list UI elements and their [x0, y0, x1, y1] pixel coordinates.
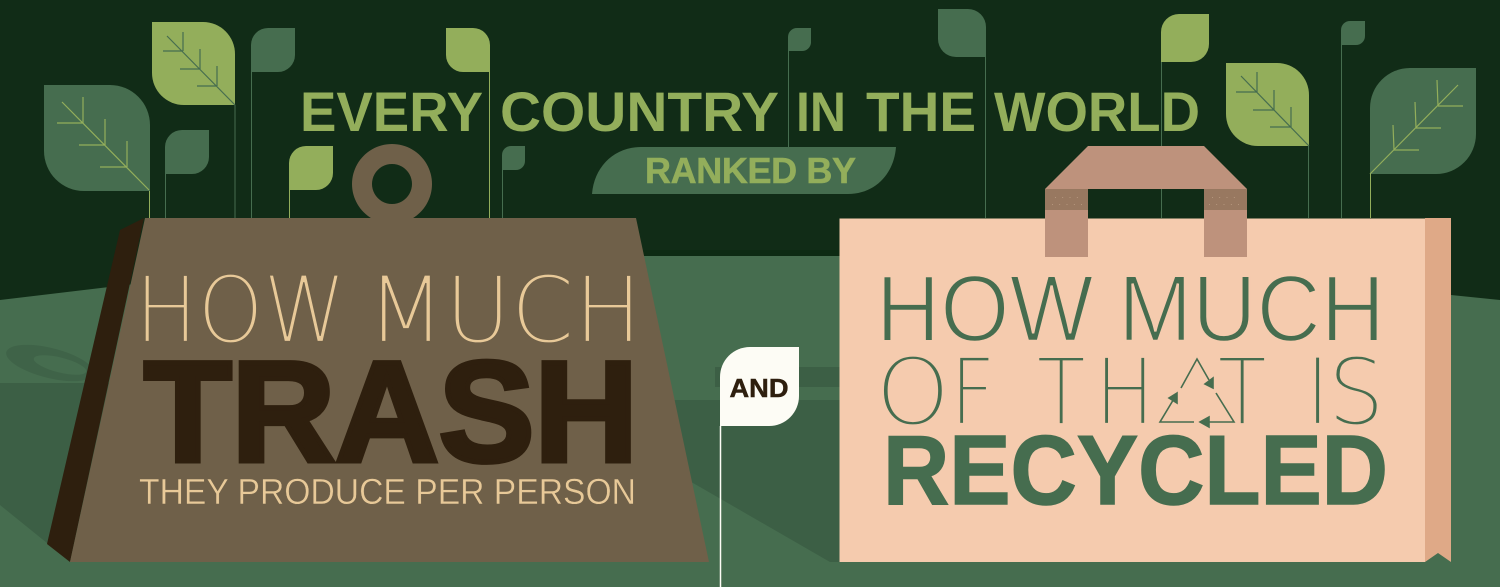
weight: ring handle [352, 144, 432, 224]
leaf: tiny dark at 502 [502, 146, 525, 218]
weight text: how much: MUCH [367, 259, 642, 364]
bag text: t is: T I [1218, 340, 1329, 446]
leaf: small dark at 251 [251, 28, 295, 218]
bag text: recycled: RECYCLED [883, 415, 1388, 525]
title: IN [796, 80, 846, 143]
leaf: dark at 938 [938, 9, 986, 218]
leaf: small dark at 165 [165, 130, 209, 218]
leaf: light at 1161 [1161, 14, 1209, 218]
leaf: large light left [152, 22, 235, 218]
bag text: t is [1218, 340, 1385, 446]
bag: side gusset [1425, 218, 1451, 562]
title: COUNTRY [500, 80, 779, 143]
title: THE [866, 80, 976, 143]
weight text: trash: TRASH [144, 333, 638, 492]
weight text: they produce per person: THEY PRODUCE PER PERSON [139, 471, 636, 512]
title [300, 80, 1200, 143]
leaf: tiny dark at 1341 [1341, 21, 1365, 218]
leaf: large light right [1226, 63, 1309, 218]
flag: and: AND [730, 373, 788, 403]
leaf: large dark left [44, 85, 150, 218]
bag text: of that: O [876, 339, 950, 445]
bag text: how much: HOW MUCH [876, 256, 1385, 362]
weight: body [47, 218, 709, 562]
weight text: how much [135, 259, 642, 364]
bag text: t is: S [1328, 340, 1385, 446]
icon: recycling triangle [1160, 359, 1234, 427]
green hills [0, 250, 1500, 587]
pill: ranked by [592, 147, 896, 194]
flag: and [720, 347, 799, 587]
leaf: small light at 289 [289, 146, 333, 218]
bag: handle [1045, 146, 1247, 257]
bag text: of that: F TH [950, 340, 1155, 446]
title: EVERY [300, 80, 483, 143]
leaf: tiny dark at 788 [788, 28, 811, 147]
bag: body [840, 218, 1425, 562]
title: WORLD [994, 80, 1200, 143]
pill: ranked by: RANKED BY [645, 150, 856, 191]
leaf: large dark right [1370, 68, 1476, 218]
weight text: how much: HOW [135, 259, 346, 364]
leaf: small light at 446 [446, 28, 490, 218]
